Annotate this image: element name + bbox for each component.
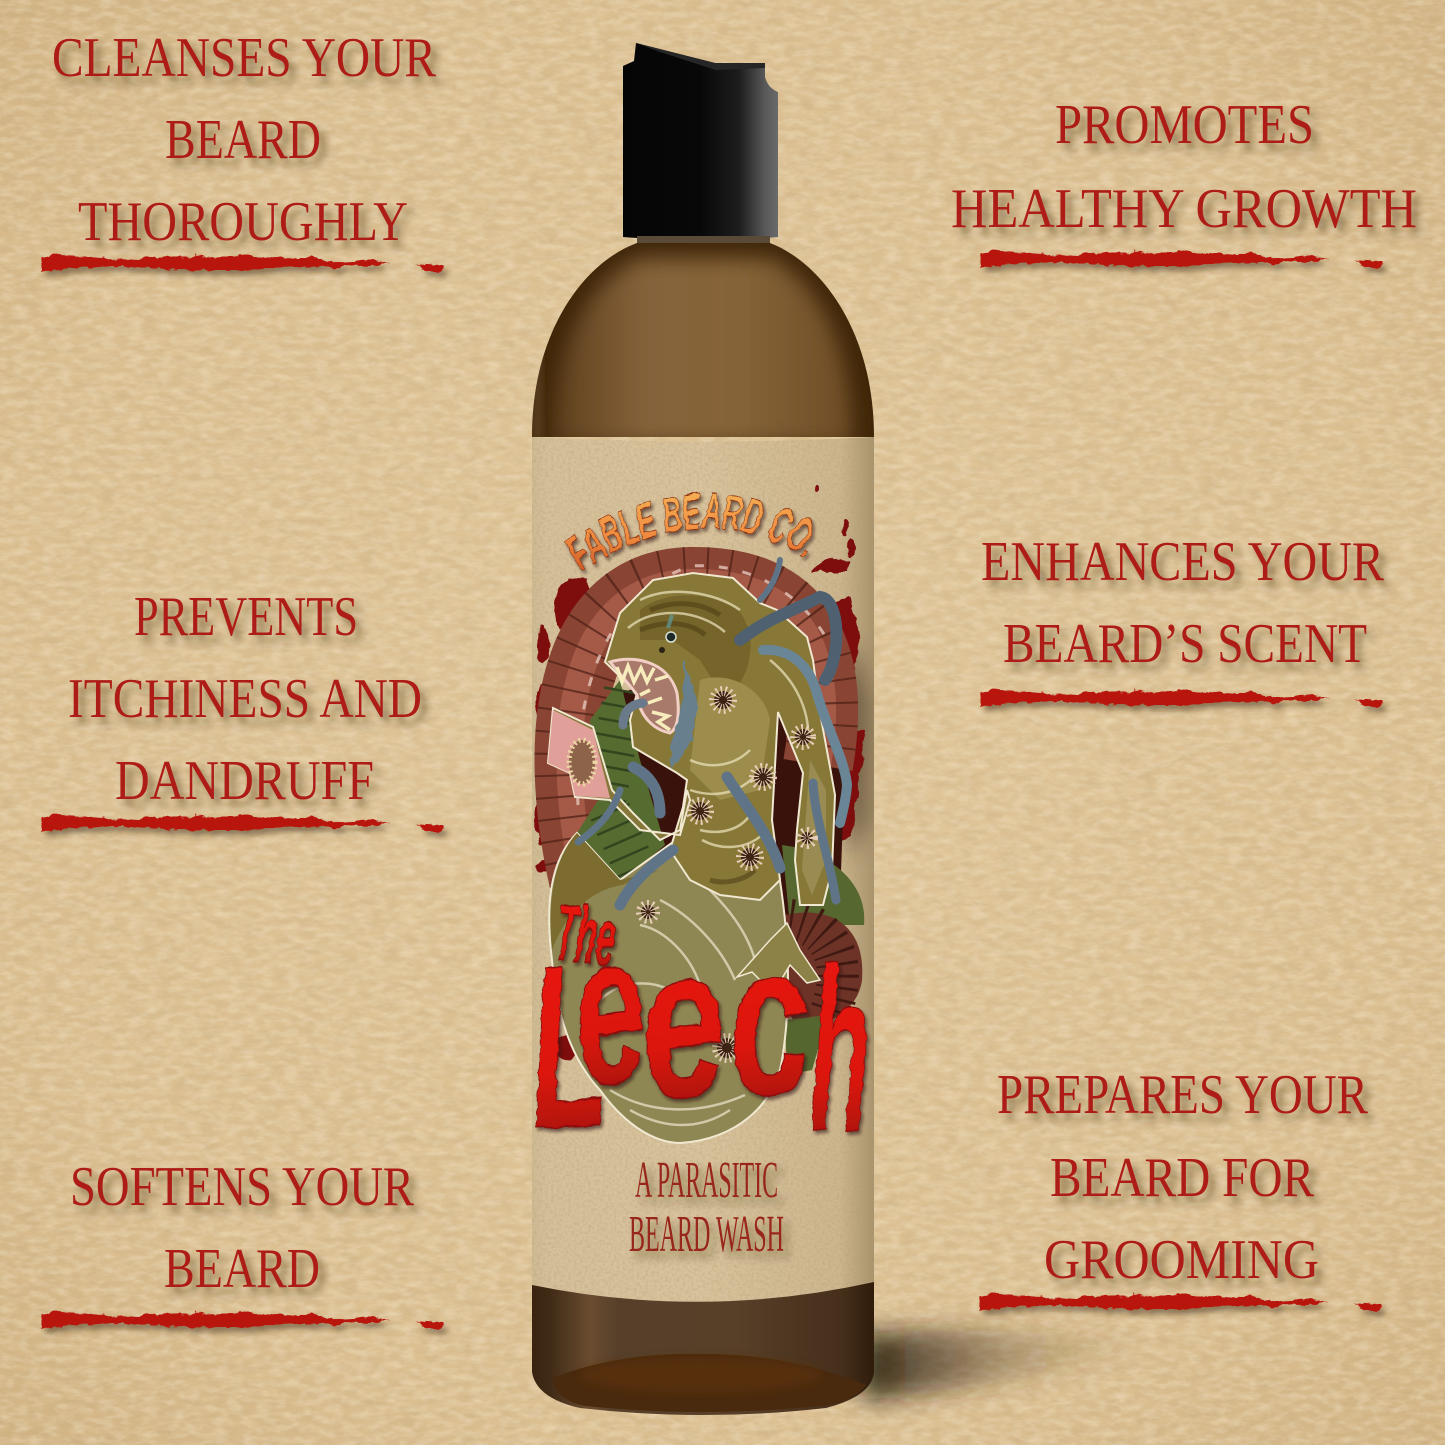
product name: The Leech: e bbox=[628, 897, 736, 1146]
benefit: prepares your beard for grooming: BEARD FOR bbox=[1050, 1147, 1315, 1209]
bottle cap bbox=[623, 43, 778, 243]
bottle floor shadow bbox=[862, 1330, 1150, 1400]
brand: Fable Beard Co.: FABLE BEARD CO. bbox=[564, 492, 816, 576]
benefit: promotes healthy growth bbox=[951, 94, 1417, 269]
product descriptor bbox=[629, 1152, 784, 1263]
product name: The Leech: c bbox=[715, 895, 821, 1144]
illustration: worm ring and creature bbox=[536, 486, 870, 1143]
benefit: prevents itchiness and dandruff bbox=[42, 586, 445, 833]
benefit: prepares your beard for grooming: GROOMING bbox=[1044, 1229, 1319, 1291]
blue worms bbox=[578, 560, 847, 905]
dark cavity behind creature bbox=[623, 690, 843, 915]
creature lower body bbox=[549, 830, 788, 1143]
benefit: prevents itchiness and dandruff: ITCHINESS AND bbox=[68, 668, 422, 730]
benefit: cleanses your beard thoroughly bbox=[42, 27, 445, 273]
benefit: enhances your beard's scent: ENHANCES YOUR bbox=[981, 531, 1385, 593]
blood splatter bbox=[536, 486, 866, 1060]
bottle label: BEARD WASH bbox=[629, 1206, 784, 1263]
creature left arm and claw bbox=[548, 708, 690, 840]
product name: The Leech bbox=[523, 885, 870, 1180]
ring drop shadow bbox=[842, 643, 874, 858]
benefit: cleanses your beard thoroughly: THOROUGHLY bbox=[78, 191, 408, 253]
benefit: prevents itchiness and dandruff: PREVENTS bbox=[134, 586, 358, 648]
product name: The Leech: The bbox=[551, 887, 620, 984]
benefit: prevents itchiness and dandruff: DANDRUFF bbox=[115, 750, 374, 812]
bottle base bbox=[532, 1280, 874, 1415]
benefit: enhances your beard's scent: BEARD’S SCENT bbox=[1003, 613, 1367, 675]
benefit: cleanses your beard thoroughly: CLEANSES YOUR bbox=[52, 27, 437, 89]
body sores bbox=[641, 691, 813, 1058]
benefit: softens your beard bbox=[42, 1156, 445, 1330]
worm green segments bbox=[577, 680, 665, 883]
creature eye bbox=[659, 615, 676, 653]
infographic canvas: h bbox=[810, 921, 870, 1180]
bottle label: A PARASITIC bbox=[635, 1152, 778, 1209]
segmented worm ring bbox=[569, 582, 823, 880]
product name: The Leech: L bbox=[523, 915, 613, 1178]
creature torso and arms bbox=[605, 573, 835, 905]
benefit: cleanses your beard thoroughly: BEARD bbox=[165, 109, 321, 171]
benefit: enhances your beard's scent bbox=[981, 531, 1385, 708]
product name: The Leech: e bbox=[562, 885, 656, 1132]
beard tendrils bbox=[670, 660, 697, 770]
bottle label bbox=[532, 437, 874, 1302]
creature foot claw bbox=[737, 923, 820, 990]
benefit: softens your beard: BEARD bbox=[164, 1238, 320, 1300]
benefit: softens your beard: SOFTENS YOUR bbox=[70, 1156, 415, 1218]
benefit: promotes healthy growth: PROMOTES bbox=[1055, 94, 1314, 156]
benefit: prepares your beard for grooming: PREPARES YOUR bbox=[997, 1064, 1369, 1126]
creature mouth bbox=[610, 659, 678, 733]
bottle shoulder bbox=[532, 240, 874, 445]
panel: product bottle bbox=[532, 43, 874, 1415]
benefit: prepares your beard for grooming bbox=[980, 1064, 1383, 1312]
